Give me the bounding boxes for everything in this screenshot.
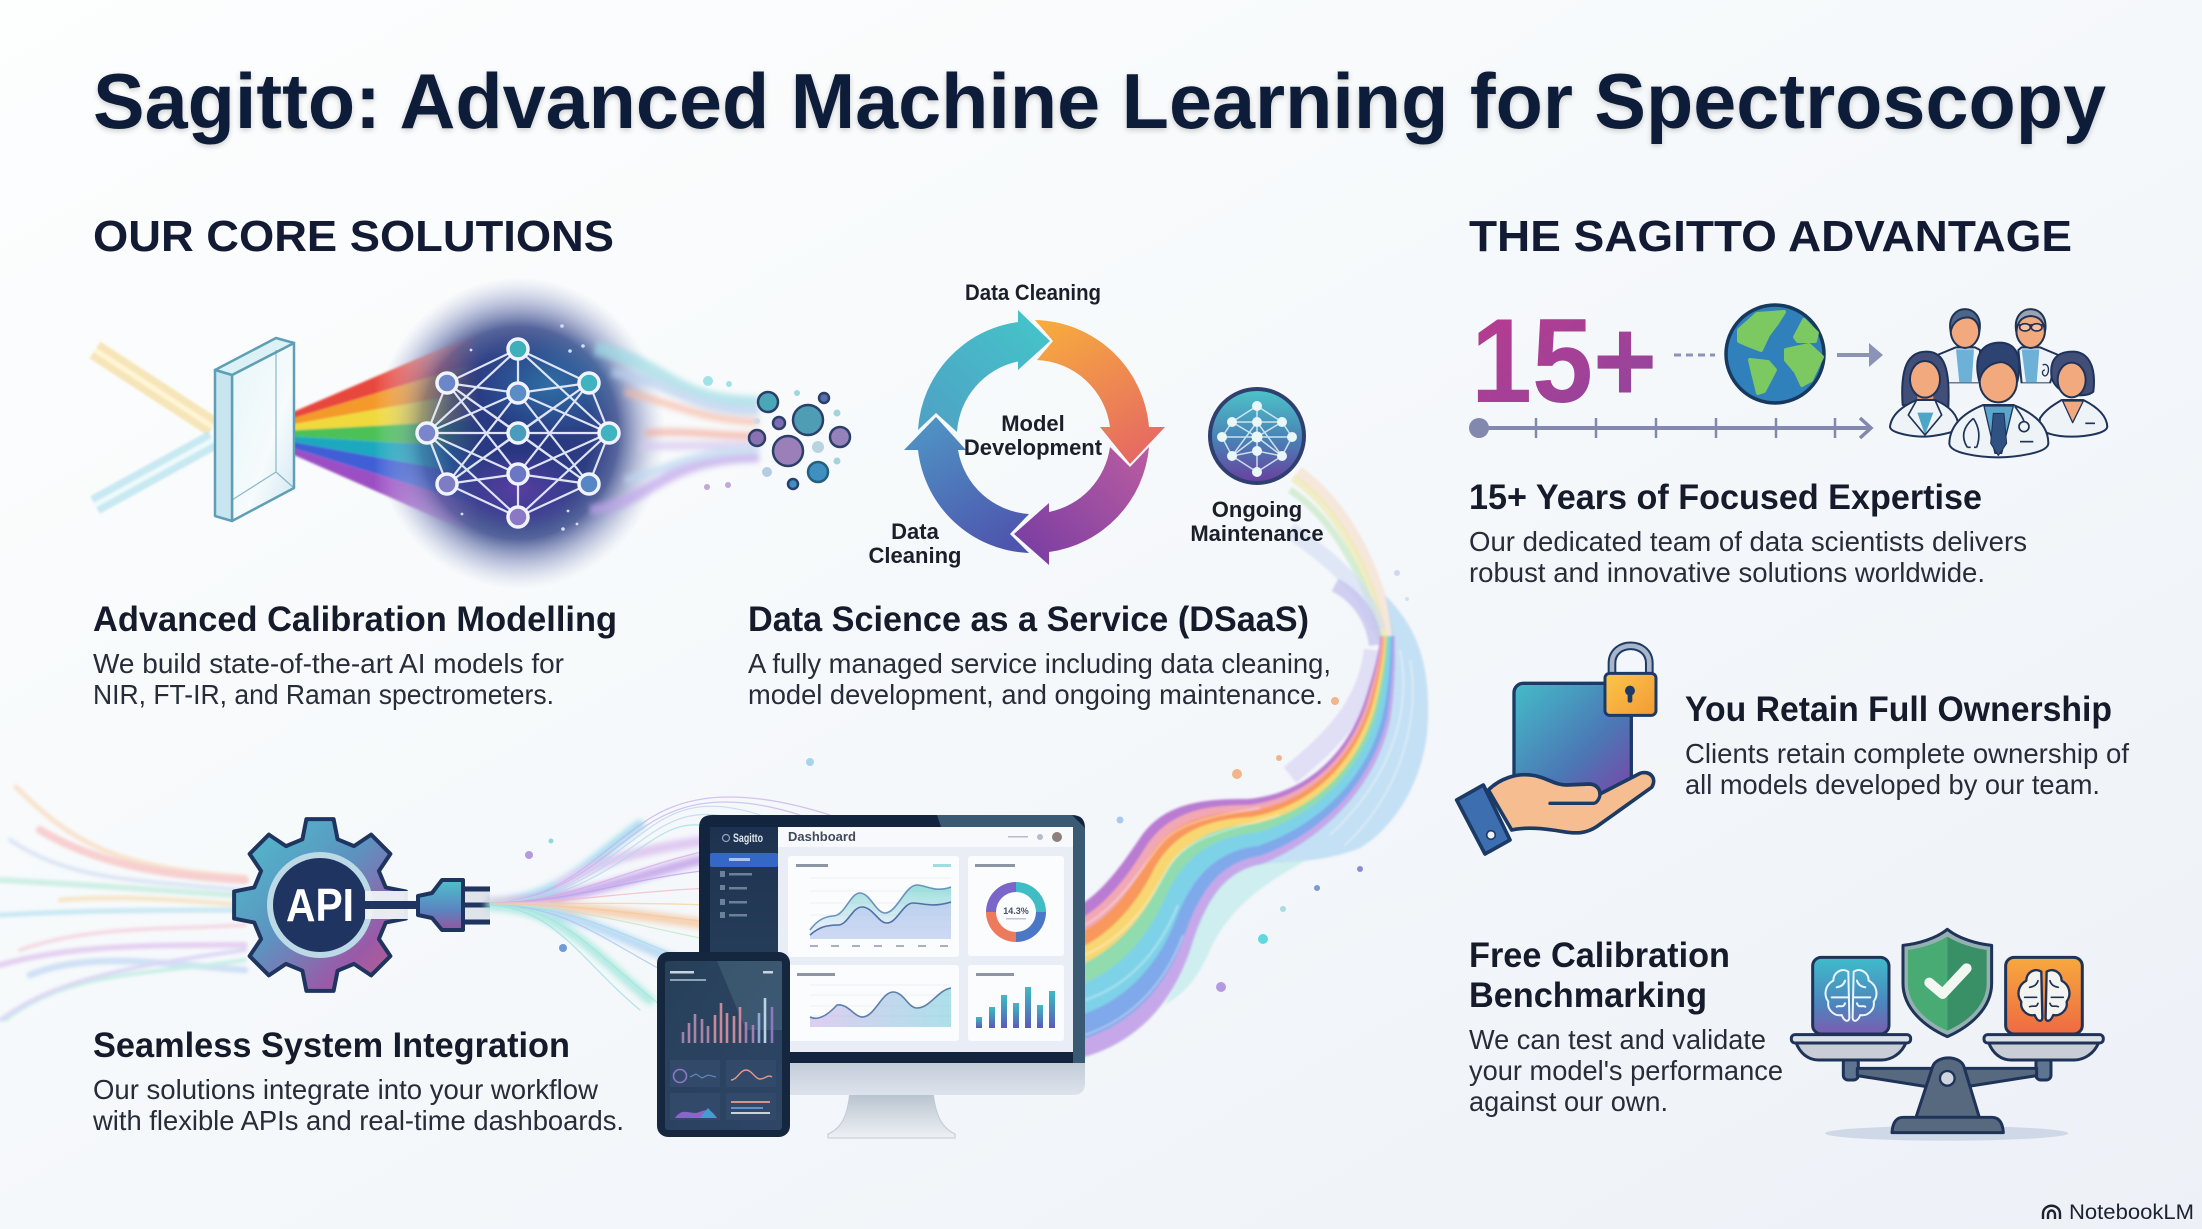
text block: free calibration benchmarking: Benchmarking (1469, 976, 1707, 1015)
icon: API gear with plug (234, 819, 490, 991)
text block: Advanced Calibration Modelling: We build state-of-the-art AI models for (93, 648, 564, 679)
chart panel: donut (968, 856, 1064, 956)
left model with brain (1813, 957, 1889, 1034)
label: API: API (286, 879, 354, 931)
ribbon: pale teal lower fringe (1165, 860, 1307, 1005)
section heading: core solutions: OUR CORE SOLUTIONS (93, 212, 614, 261)
arrow: globe to team (1837, 343, 1883, 367)
label: data cleaning lower: Cleaning (869, 543, 961, 568)
monitor stand (828, 1090, 955, 1138)
icon: team of scientists (1890, 309, 2107, 457)
text block: 15+ years of expertise (1469, 478, 2027, 588)
tablet bar chart (683, 998, 772, 1043)
icon: dark glow behind network (373, 277, 665, 589)
icon: incoming light beams (95, 350, 213, 505)
text block: you retain full ownership: all models developed by our team. (1685, 769, 2100, 800)
section heading: advantage: THE SAGITTO ADVANTAGE (1469, 212, 2072, 261)
padlock (1605, 646, 1656, 715)
text block: Seamless System Integration (92, 1026, 624, 1136)
text block: you retain full ownership: You Retain Full Ownership (1685, 690, 2112, 729)
text block: 15+ years of expertise: 15+ Years of Focused Expertise (1469, 478, 1982, 517)
arrow: purple (1014, 447, 1149, 565)
shield with check (1903, 929, 1992, 1037)
dashboard sidebar (710, 827, 778, 1052)
data stream from plug to dashboard (490, 797, 830, 1010)
label: ongoing maintenance: Maintenance (1190, 521, 1324, 546)
ribbon: fine highlights (1085, 650, 1413, 1035)
text block: free calibration benchmarking: against our own. (1469, 1086, 1668, 1117)
title: Sagitto: Advanced Machine Learning for Spectroscopy (93, 57, 2106, 145)
icon: hand holding locked model (1457, 646, 1656, 854)
connector cable (365, 891, 408, 919)
icon: data point cluster (703, 376, 850, 490)
lead scientist (1949, 343, 2048, 457)
scale stand and beam (1843, 1058, 2051, 1133)
model card (1514, 683, 1631, 797)
chart panel: bars (968, 965, 1064, 1041)
watermark: NotebookLM: NotebookLM (2069, 1201, 2194, 1224)
text block: Advanced Calibration Modelling: NIR, FT-IR, and Raman spectrometers. (93, 679, 554, 710)
text block: Data Science as a Service: A fully managed service including data cleaning, (748, 648, 1331, 679)
icon: data streams leaving network (590, 348, 759, 510)
text block: 15+ years of expertise: robust and innovative solutions worldwide. (1469, 557, 1985, 588)
right scale pan (1984, 1035, 2103, 1060)
label: ongoing maintenance: Ongoing (1212, 497, 1302, 522)
icon strip: 15+ years, globe and team (1469, 294, 2107, 457)
text block: 15+ years of expertise: Our dedicated team of data scientists delivers (1469, 526, 2027, 557)
text block: Data Science as a Service: model development, and ongoing maintenance. (748, 679, 1323, 710)
plug (418, 880, 490, 930)
text block: free calibration benchmarking: Free Calibration (1469, 936, 1730, 975)
ribbon: pale blue right lobe (1260, 595, 1428, 864)
tablet with dark dashboard (657, 952, 790, 1137)
text block: Seamless System Integration: with flexible APIs and real-time dashboards. (92, 1105, 624, 1136)
label: model development: Development (964, 435, 1103, 460)
dashboard sidebar: Sagitto (733, 831, 763, 845)
floating particles (525, 570, 1409, 992)
right woman scientist (2039, 352, 2107, 437)
hand (1488, 773, 1654, 833)
text block: you retain full ownership (1685, 690, 2129, 800)
text block: free calibration benchmarking (1469, 936, 1783, 1117)
label: data cleaning top: Data Cleaning (965, 280, 1101, 305)
icon: glass prism (215, 338, 294, 521)
chart panel: area chart bottom (788, 965, 959, 1041)
text block: free calibration benchmarking: We can test and validate (1469, 1024, 1766, 1055)
icon: rainbow fan (295, 338, 474, 526)
monitor with dashboard (699, 815, 1085, 1138)
back right scientist (2016, 309, 2058, 383)
icon: neural network (417, 324, 619, 531)
data stream flowing into gear (0, 787, 245, 1020)
arrow: blue (904, 417, 1029, 553)
icon: ongoing maintenance badge (1210, 389, 1304, 483)
left scale pan (1791, 1035, 1911, 1060)
text block: Data Science as a Service: Data Science as a Service (DSaaS) (748, 600, 1309, 639)
text block: you retain full ownership: Clients retain complete ownership of (1685, 738, 2129, 769)
shirt cuff (1457, 785, 1510, 854)
arrow: teal (918, 310, 1050, 432)
text block: Seamless System Integration: Our solutions integrate into your workflow (93, 1074, 599, 1105)
monitor bezel (699, 815, 1085, 1063)
big number 15+: 15+ (1471, 294, 1657, 428)
arrow: orange (1035, 320, 1165, 464)
monitor chin (699, 1060, 1085, 1095)
dashboard screen (778, 827, 1073, 1052)
timeline arrow (1469, 418, 1871, 438)
dashboard screen: Dashboard (788, 829, 856, 844)
label: model development: Model (1001, 411, 1065, 436)
scale shadow (1825, 1126, 2068, 1141)
text block: Data Science as a Service (748, 600, 1331, 710)
chart panel: donut: 14.3% (1003, 906, 1029, 916)
dashed connector (1674, 354, 1715, 356)
gear (234, 819, 406, 991)
right model with brain (2006, 957, 2082, 1034)
back left scientist (1937, 309, 1980, 383)
cycle diagram: data science loop (869, 280, 1165, 568)
text block: Seamless System Integration: Seamless System Integration (93, 1026, 570, 1065)
illustration: light through prism into neural network (95, 277, 850, 589)
text block: Advanced Calibration Modelling: Advanced Calibration Modelling (93, 600, 617, 639)
label: data cleaning lower: Data (891, 519, 940, 544)
ribbon: pale upper strand (1290, 472, 1390, 775)
rainbow ribbon flowing from maintenance badge to monitor (1080, 472, 1428, 1058)
icon: balance scale with brains and shield (1791, 929, 2103, 1141)
text block: free calibration benchmarking: your model's performance (1469, 1055, 1783, 1086)
text block: Advanced Calibration Modelling (93, 600, 617, 710)
left woman scientist (1890, 352, 1958, 437)
chart panel: area chart top (788, 856, 959, 957)
tablet mini panels (670, 1060, 776, 1120)
icon: globe (1726, 305, 1824, 403)
ribbon: rainbow bands (1080, 636, 1395, 1058)
